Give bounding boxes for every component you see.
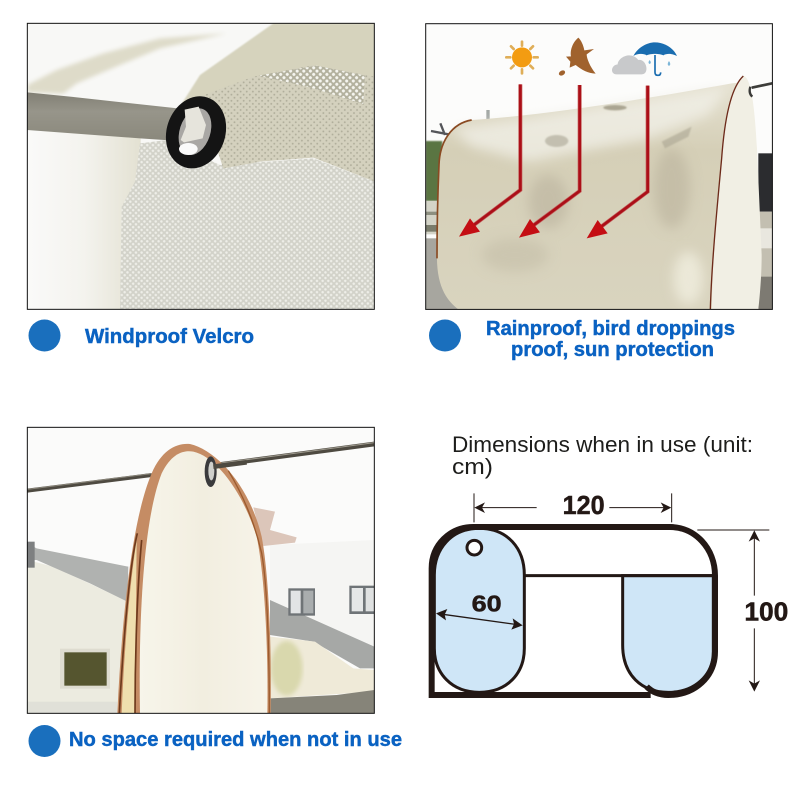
left end panel	[434, 528, 524, 692]
heading: Dimensions when in use (unit:	[452, 432, 753, 457]
panel: no space required	[27, 427, 402, 757]
panel: windproof velcro	[27, 23, 375, 351]
panel: dimensions	[432, 432, 788, 695]
caption: proof, sun protection	[511, 339, 714, 361]
icon: cloud	[612, 55, 646, 74]
panel: rainproof cover	[426, 24, 772, 361]
heading: cm)	[452, 454, 493, 479]
caption: Windproof Velcro	[85, 326, 254, 348]
cover outline	[432, 527, 715, 695]
bullet dot	[28, 320, 60, 352]
grommet	[467, 540, 482, 555]
depth arrow	[436, 609, 523, 630]
arrow 3	[587, 86, 648, 238]
caption: No space required when not in use	[69, 729, 402, 751]
dimension diagram	[432, 490, 788, 695]
photo: cover hanging on pole	[426, 24, 772, 309]
height arrow	[697, 530, 769, 692]
arrow 2	[519, 85, 580, 238]
label 60: 60	[472, 591, 502, 617]
caption	[486, 318, 735, 361]
top fold line	[524, 571, 713, 580]
beige ribbon at left	[27, 33, 227, 94]
right end panel	[623, 576, 713, 692]
label 100: 100	[744, 597, 788, 627]
icon: sun	[506, 42, 538, 73]
icon: umbrella	[633, 42, 677, 75]
photo: folded cover on pole	[27, 427, 374, 713]
bullet dot	[429, 320, 461, 352]
icon: bird	[558, 38, 596, 77]
photo: grommet on pole and mesh	[27, 23, 375, 310]
beige wedge over the pole	[181, 24, 374, 104]
width arrow	[474, 493, 672, 522]
label 120: 120	[563, 490, 605, 520]
arrow 1	[459, 84, 520, 237]
photo frame	[426, 24, 772, 309]
bullet dot	[28, 725, 60, 757]
heading	[452, 432, 753, 479]
caption: Rainproof, bird droppings	[486, 318, 735, 340]
